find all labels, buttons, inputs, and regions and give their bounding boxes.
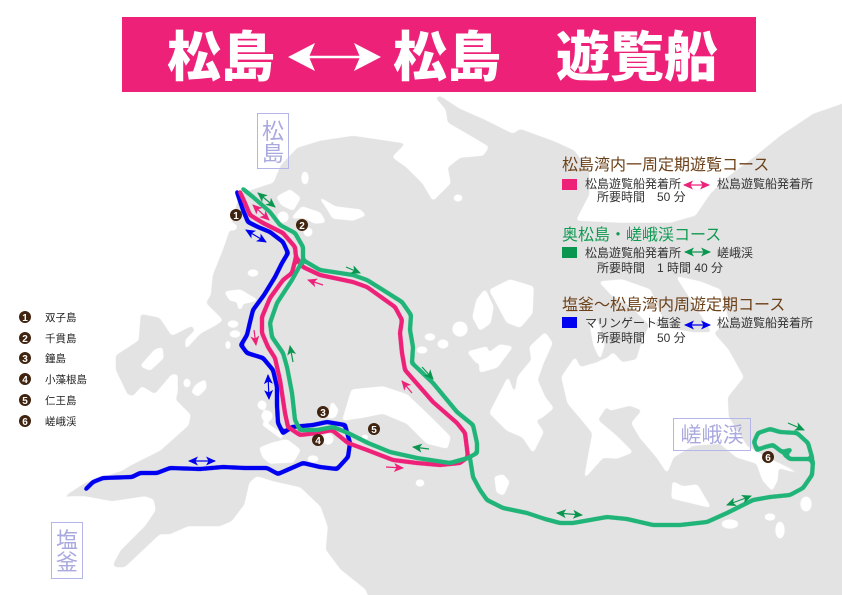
- place label: Sagakei: 嵯峨渓: [680, 424, 744, 447]
- legend: Shiogama course: 所要時間: [597, 331, 645, 345]
- route: green Oku-Matsushima course: [243, 189, 477, 463]
- numbered island list: 2: [22, 334, 28, 345]
- legend: Shiogama course: 塩釜～松島湾内周遊定期コース: [562, 296, 785, 314]
- legend: Shiogama course: 松島遊覧船発着所: [717, 315, 813, 330]
- map number markers: 1: [233, 211, 239, 222]
- place label: Shiogama: [52, 522, 82, 578]
- numbered island list: 仁王島: [45, 394, 76, 407]
- map number markers: 2: [299, 221, 305, 232]
- route: green extension to Sagakei: [470, 429, 813, 525]
- map number markers: 4: [315, 436, 321, 447]
- numbered island list: 千貫島: [45, 332, 76, 345]
- numbered island list: 小藻根島: [45, 373, 87, 386]
- place label: Shiogama: 塩: [56, 528, 78, 553]
- title banner: 松島: [167, 28, 275, 88]
- map number markers: [230, 209, 774, 464]
- legend: Matsushima Bay course: [562, 156, 813, 204]
- legend: Matsushima Bay course: 所要時間: [597, 190, 645, 204]
- legend: Shiogama course: 50 分: [657, 331, 686, 345]
- numbered island list: 嵯峨渓: [45, 415, 77, 428]
- legend: Oku-Matsushima and Sagakei course: 奥松島・嵯峨渓コース: [562, 226, 721, 244]
- place label: Shiogama: 釜: [56, 550, 78, 575]
- legend: Matsushima Bay course: 松島遊覧船発着所: [585, 176, 681, 191]
- numbered island list: 5: [22, 396, 28, 407]
- legend: Oku-Matsushima and Sagakei course: 1 時間 40 分: [657, 261, 723, 275]
- place label: Sagakei: [674, 418, 750, 450]
- place label: Matsushima: 松: [262, 119, 284, 144]
- map number markers: 6: [765, 453, 771, 464]
- numbered island list: 6: [22, 417, 28, 428]
- numbered island list: 鐘島: [45, 352, 66, 365]
- title banner: 遊覧船: [556, 28, 718, 88]
- legend: Matsushima Bay course: 松島遊覧船発着所: [717, 176, 813, 191]
- legend: Oku-Matsushima and Sagakei course: 嵯峨渓: [717, 246, 753, 260]
- numbered island list: 4: [22, 375, 28, 386]
- place label: Matsushima: [258, 114, 288, 168]
- direction arrows: [189, 193, 804, 515]
- route: blue Shiogama course: [86, 192, 350, 489]
- legend: Oku-Matsushima and Sagakei course: 松島遊覧船発着所: [585, 245, 681, 260]
- numbered island list: 双子島: [45, 311, 76, 324]
- place label: Matsushima: 島: [262, 141, 284, 166]
- route: pink bay course: [240, 192, 468, 465]
- map number markers: 5: [371, 425, 377, 436]
- legend: Shiogama course: マリンゲート塩釜: [585, 315, 681, 330]
- legend: Shiogama course: [562, 296, 813, 345]
- numbered island list: [19, 311, 87, 428]
- legend: Matsushima Bay course: 50 分: [657, 190, 686, 204]
- map number markers: 3: [320, 408, 326, 419]
- legend: Matsushima Bay course: 松島湾内一周定期遊覧コース: [562, 156, 769, 174]
- numbered island list: 1: [22, 313, 28, 324]
- title banner: [122, 17, 756, 92]
- numbered island list: 3: [22, 354, 28, 365]
- title banner: 松島: [393, 28, 501, 88]
- legend: Oku-Matsushima and Sagakei course: 所要時間: [597, 261, 645, 275]
- legend: Oku-Matsushima and Sagakei course: [562, 226, 753, 275]
